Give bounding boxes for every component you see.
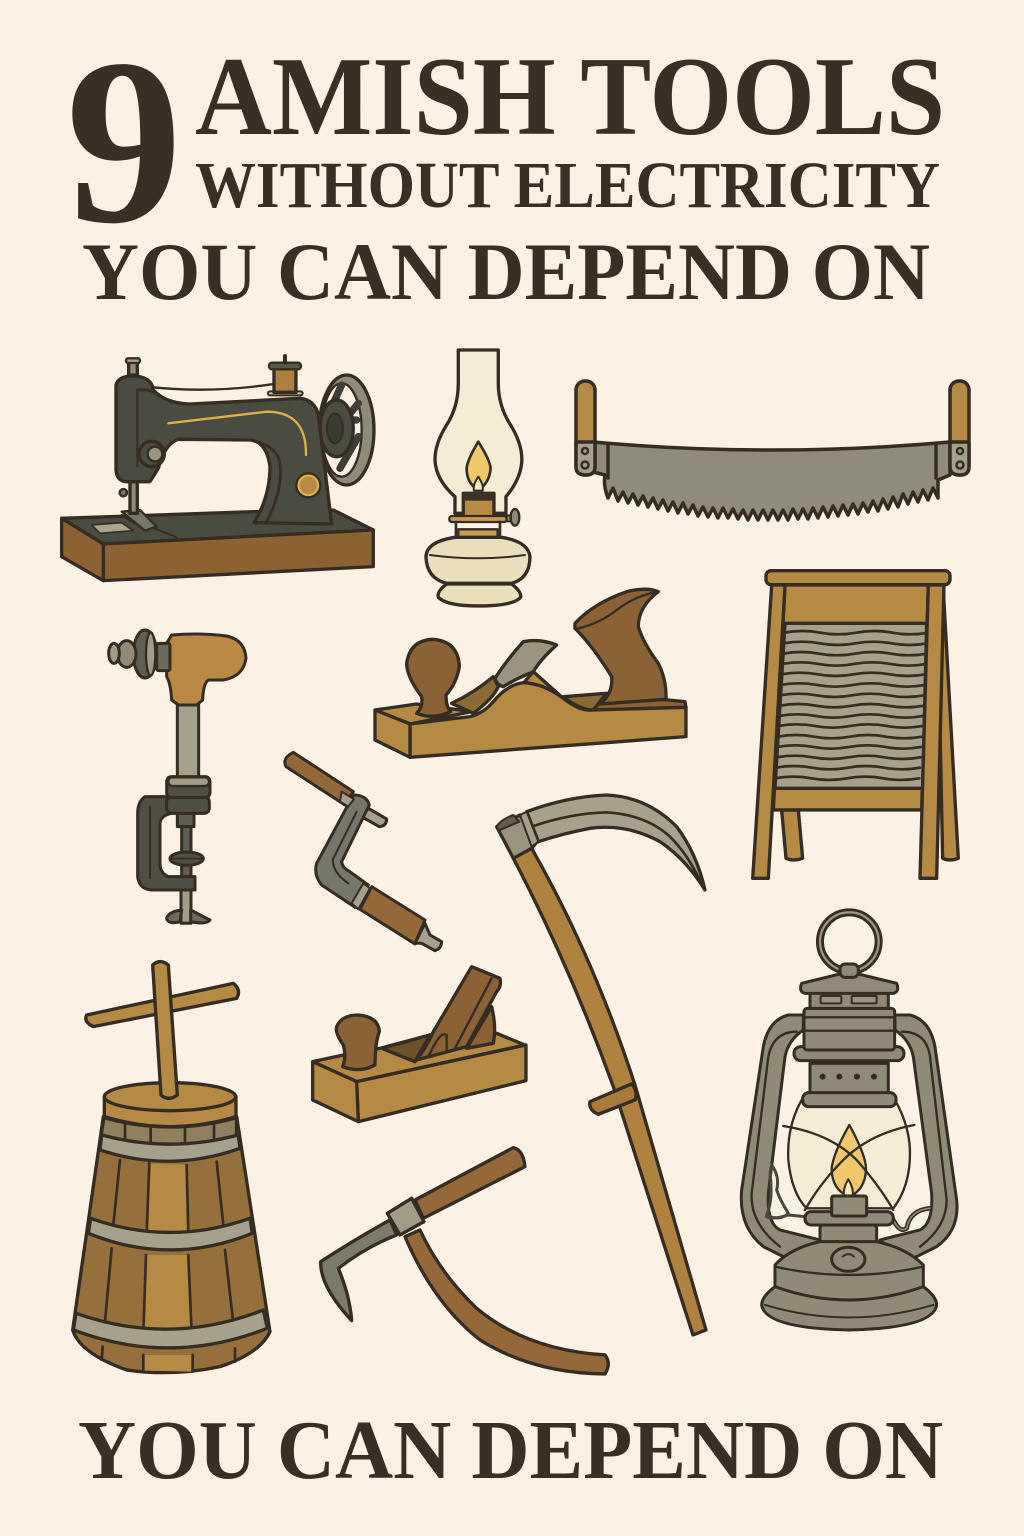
icon: pick mattock <box>321 1148 608 1374</box>
icon: scythe <box>497 795 706 1335</box>
icon: hand drill with clamp <box>109 630 246 923</box>
icon: treadle sewing machine <box>62 356 374 581</box>
title <box>66 11 945 317</box>
footer heading: YOU CAN DEPEND ON <box>78 1404 943 1497</box>
title: WITHOUT ELECTRICITY <box>195 149 940 222</box>
title: 9 <box>66 11 182 273</box>
title: YOU CAN DEPEND ON <box>82 226 930 317</box>
icon: small block plane <box>313 967 526 1122</box>
icon: brace and bit crank <box>285 752 442 951</box>
icon: butter churn <box>73 962 270 1373</box>
icon: bench plane <box>375 589 686 757</box>
icon: oil lamp <box>426 350 530 606</box>
icon: hurricane lantern <box>741 912 957 1330</box>
icon: two-man crosscut saw <box>576 381 969 520</box>
title: AMISH TOOLS <box>195 35 945 159</box>
icon: handwheel <box>319 375 374 485</box>
icon: washboard <box>753 571 958 878</box>
